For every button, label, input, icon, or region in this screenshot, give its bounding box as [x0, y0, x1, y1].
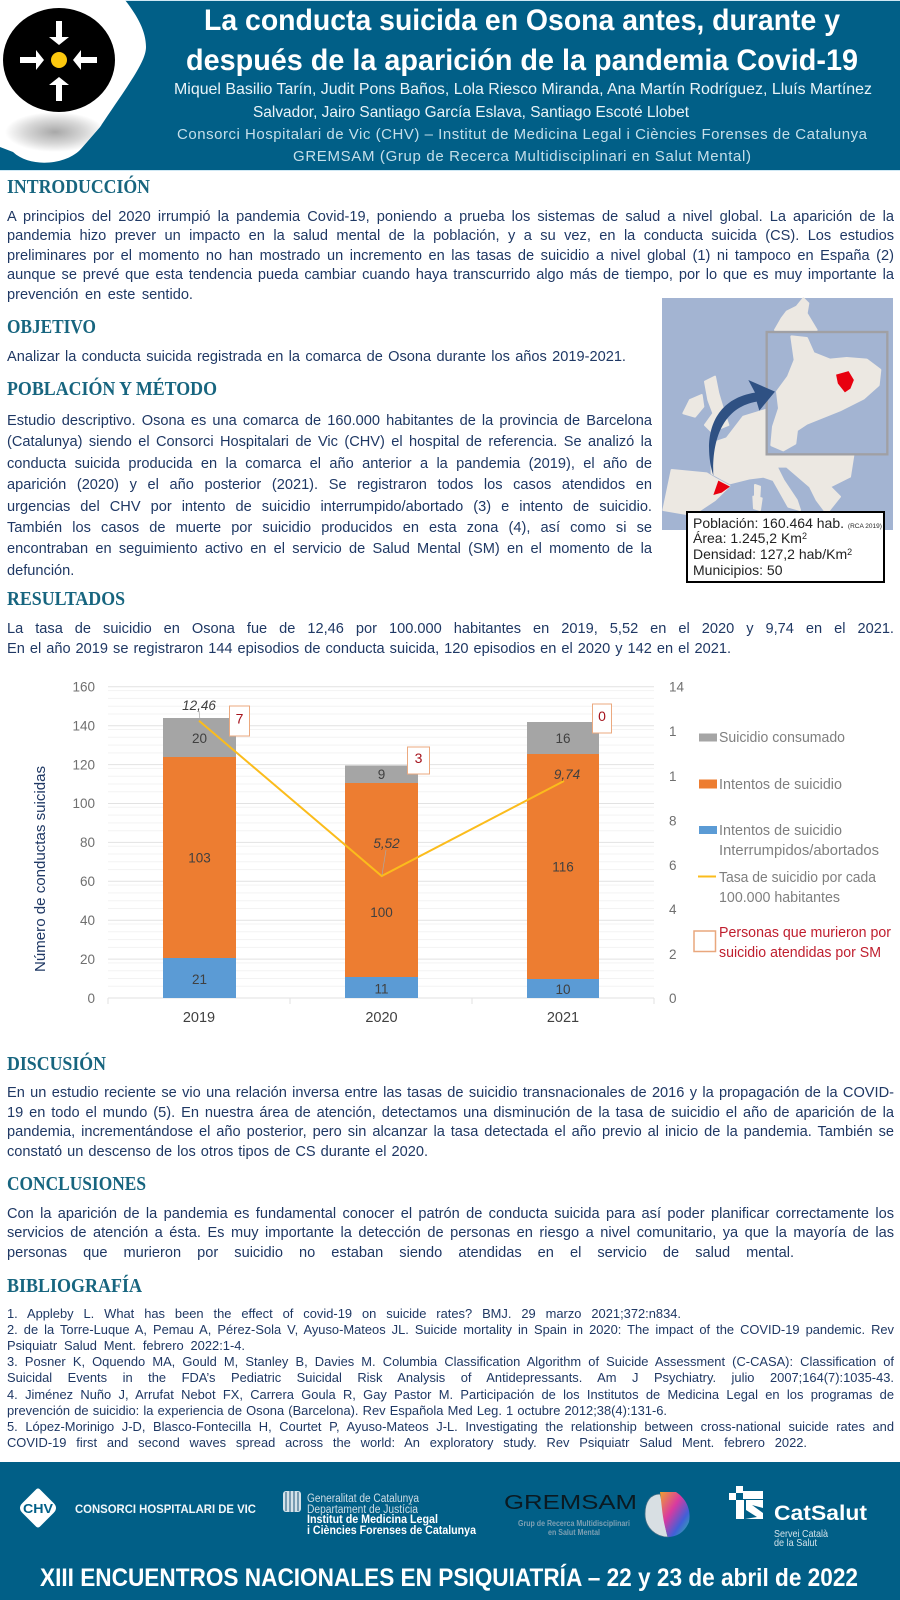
header banner: [0, 0, 900, 171]
logo: CHV: [22, 1491, 256, 1525]
left axis labels: [72, 680, 95, 1006]
title: después de la aparición de la pandemia Covid-19: [186, 44, 858, 77]
chart legend: [677, 720, 900, 965]
affiliations: [177, 126, 868, 165]
left axis labels: 140: [72, 718, 95, 734]
right axis labels: 0: [669, 991, 677, 1006]
right axis labels: 4: [669, 902, 677, 917]
logo: GREMSAM: GREMSAM: [504, 1492, 637, 1514]
logo: Generalitat de Catalunya: Departament de Justícia: [307, 1504, 419, 1516]
text block: población y método: Estudio descriptivo. Osona es una comarca de 160.000 habitantes de la provincia de Barcelona: [7, 413, 652, 429]
references list: Suicidal Events in the FDA’s Pediatric Suicidal Risk Analysis of Antidepressants. Am J Psychiatry. julio 2007;164(7):1035-43.: [7, 1370, 894, 1385]
text block: población y método: urgencias del CHV por intento de suicidio interrumpido/abortado (3) e intento de suicidio.: [7, 499, 652, 515]
bars 2020: 11: [374, 982, 389, 996]
right axis labels: 12: [669, 724, 684, 739]
chart legend: Intentos de suicidio: [719, 777, 842, 793]
references list: COVID-19 first and second waves spread across the world: An exploratory study. Rev Psiquiatr Salud Ment. febrero 2022.: [7, 1435, 807, 1450]
text block: población y método: [7, 413, 652, 579]
title: [186, 4, 858, 77]
text block: introducción: aunque se prevé que esta tendencia pueda cambiar cuando haya transcurrido algo más de tiempo, por lo que es muy importante la: [7, 267, 894, 283]
map: location of Osona: [662, 298, 893, 530]
bars 2021: [527, 722, 599, 998]
title: La conducta suicida en Osona antes, durante y: [204, 4, 840, 37]
logo: Generalitat de Catalunya: Institut de Medicina Legal: [307, 1514, 438, 1526]
heading: objetivo: OBJETIVO: [7, 316, 96, 338]
text block: población y método: (Catalunya) siendo el Consorci Hospitalari de Vic (CHV) el hospital de referencia. Se analizó la: [7, 434, 652, 450]
right axis labels: [669, 680, 685, 1006]
chart legend: 100.000 habitantes: [719, 890, 840, 906]
x axis labels: 2021: [547, 1010, 579, 1026]
references list: [7, 1306, 894, 1450]
references list: 4. Jiménez Nuño J, Arrufat Nebot FX, Carrera Goula R, Gay Pastor M. Participación de los Institutos de Medicina Legal en los programas de: [7, 1387, 894, 1402]
x axis labels: 2020: [365, 1010, 398, 1026]
text block: población y método: encontraban en seguimiento activo en el servicio de Salud Mental (SM) en el momento de la: [7, 541, 652, 557]
rate labels: 12,46: [182, 698, 216, 713]
map info box: 2: [802, 531, 807, 541]
text block: población y método: aparición (2020) y el año posterior (2021). Se registraron todos los casos atendidos en: [7, 477, 652, 493]
left axis labels: 20: [80, 952, 95, 967]
authors: Miquel Basilio Tarín, Judit Pons Baños, Lola Riesco Miranda, Ana Martín Rodríguez, Lluís Martínez: [174, 81, 872, 98]
text block: conclusiones: [7, 1206, 894, 1261]
text block: discusión: En un estudio reciente se vio una relación inversa entre las tasas de suicidio transnacionales de 2016 y la propagación de la COVID-: [7, 1085, 894, 1101]
logo: CHV: CONSORCI HOSPITALARI DE VIC: [75, 1504, 256, 1516]
map info box: Municipios: 50: [693, 562, 783, 578]
icon: brain: [645, 1492, 690, 1537]
text block: discusión: pandemia, incrementándose el año posterior, pero sin alcanzar la tasa detectada el año previo al inicio de la pandemia. También se: [7, 1124, 894, 1140]
text block: discusión: 19 en todo el mundo (5). En nuestra área de atención, detectamos una disminución de la tasa de suicidio el año de aparición de la: [7, 1105, 894, 1121]
chart gridlines: [108, 691, 654, 986]
footer band: [0, 1462, 900, 1600]
logo: GREMSAM: [504, 1492, 690, 1537]
map info box: Población: 160.464 hab. (RCA 2019): [693, 515, 882, 531]
left axis labels: 160: [72, 680, 95, 694]
chart legend: suicidio atendidas por SM: [719, 945, 881, 961]
text block: discusión: constató un descenso de los otros tipos de CS durante el 2020.: [7, 1144, 428, 1160]
text block: resultados: [7, 621, 894, 657]
references list: prevención de suicidio: la experiencia de Osona (Barcelona). Rev Española Med Leg. 1 octubre 2012;38(4):131-6.: [7, 1403, 667, 1418]
right axis labels: 14: [669, 680, 685, 694]
box: SM deaths 2019: 7: [236, 710, 244, 726]
box: SM deaths 2020: 3: [415, 750, 423, 766]
right axis labels: 2: [669, 947, 677, 962]
y axis title: Número de conductas suicidas: [32, 766, 49, 972]
text block: introducción: [7, 209, 894, 303]
logo: Generalitat de Catalunya: [283, 1491, 477, 1537]
chart legend: Tasa de suicidio por cada: [719, 870, 877, 886]
affiliations: Consorci Hospitalari de Vic (CHV) – Institut de Medicina Legal i Ciències Forenses de Catalunya: [177, 126, 868, 143]
logo: Generalitat de Catalunya: Generalitat de Catalunya: [307, 1493, 420, 1505]
rate labels: 9,74: [554, 767, 580, 782]
text block: introducción: A principios del 2020 irrumpió la pandemia Covid-19, poniendo a prueba los sistemas de salud a nivel global. La aparición de la: [7, 209, 894, 225]
map info box: [687, 512, 884, 582]
bars 2021: 10: [555, 982, 571, 997]
logo: GREMSAM: en Salut Mental: [548, 1528, 600, 1537]
logo: CHV: CHV: [23, 1502, 54, 1516]
icon: converging arrows logo: [0, 0, 146, 163]
text block: resultados: En el año 2019 se registraron 144 episodios de conducta suicida, 120 episodios en el 2020 y 142 en el 2021.: [7, 641, 731, 657]
heading: resultados: RESULTADOS: [7, 588, 125, 610]
box: SM deaths 2021: 0: [598, 708, 606, 724]
bars 2019: 103: [188, 850, 211, 866]
chart legend: Interrumpidos/abortados: [719, 843, 879, 859]
right axis labels: 6: [669, 858, 677, 873]
authors: Salvador, Jairo Santiago García Eslava, Santiago Escoté Llobet: [253, 104, 690, 121]
chart legend: Intentos de suicidio: [719, 823, 842, 839]
box: SM deaths 2021: [592, 704, 612, 733]
references list: 3. Posner K, Oquendo MA, Gould M, Stanley B, Davies M. Columbia Classification Algorithm of Suicide Assessment (C-CASA): Classification of: [7, 1354, 894, 1369]
x axis labels: 2019: [183, 1010, 215, 1026]
references list: 1. Appleby L. What has been the effect of covid-19 on suicide rates? BMJ. 29 marzo 2021;372:n834.: [7, 1306, 681, 1321]
rate line: [199, 721, 564, 876]
bars 2020: [345, 766, 418, 998]
text block: población y método: También los casos de muerte por suicidio producidos en esta zona (4), así como si se: [7, 520, 652, 536]
x axis labels: [183, 1010, 579, 1026]
text block: discusión: [7, 1085, 894, 1160]
chart legend: Suicidio consumado: [719, 730, 845, 746]
references list: 2. de la Torre-Luque A, Pemau A, Pérez-Sola V, Ayuso-Mateos JL. Suicide mortality in Spain in 2020: The impact of the COVID-19 pandemic. Rev: [7, 1322, 894, 1337]
logo: CatSalut: [729, 1486, 867, 1549]
heading: introducción: INTRODUCCIÓN: [7, 174, 150, 198]
map info box: 2: [847, 547, 852, 557]
bars 2019: [163, 718, 236, 998]
heading: conclusiones: CONCLUSIONES: [7, 1173, 146, 1195]
logo: CatSalut: de la Salut: [774, 1537, 817, 1549]
left axis labels: 0: [87, 991, 95, 1006]
text block: introducción: preliminares por el momento no han mostrado un incremento en las tasas de suicidio a nivel global (1) ni tampoco en España (2): [7, 248, 894, 264]
logo: Generalitat de Catalunya: i Ciències Forenses de Catalunya: [307, 1525, 477, 1537]
left axis labels: 120: [72, 758, 95, 772]
logo: GREMSAM: Grup de Recerca Multidisciplinari: [518, 1519, 630, 1528]
text block: objetivo: Analizar la conducta suicida registrada en la comarca de Osona durante los años 2019-2021.: [7, 349, 626, 365]
heading: discusión: DISCUSIÓN: [7, 1051, 106, 1075]
references list: Psiquiatr Salud Ment. febrero 2022:1-4.: [7, 1338, 245, 1353]
rate labels: [182, 698, 580, 875]
bars 2020: 100: [370, 905, 393, 920]
heading: bibliografía: BIBLIOGRAFÍA: [7, 1274, 142, 1297]
logo: CatSalut: Servei Català: [774, 1528, 828, 1540]
rate labels: 5,52: [373, 836, 400, 851]
left axis labels: 100: [72, 796, 95, 811]
left axis labels: 40: [80, 913, 95, 928]
map info box: Densidad: 127,2 hab/Km: [693, 546, 847, 562]
right axis labels: 10: [669, 769, 684, 784]
combo chart: suicidal behaviour by year: [32, 680, 900, 1026]
text block: resultados: La tasa de suicidio en Osona fue de 12,46 por 100.000 habitantes en 2019, 5,52 en el 2020 y 9,74 en el 2021.: [7, 621, 894, 637]
bars 2021: 116: [552, 860, 574, 874]
logo: CatSalut: CatSalut: [774, 1502, 867, 1525]
text block: introducción: prevención en este sentido.: [7, 287, 193, 303]
text block: conclusiones: Con la aparición de la pandemia es fundamental conocer el patrón de conducta suicida para así poder planificar correctamente los: [7, 1206, 894, 1222]
text block: conclusiones: personas que murieron por suicidio no estaban siendo atendidas en el servicio de salud mental.: [7, 1245, 794, 1261]
chart legend: Personas que murieron por: [719, 925, 891, 941]
left axis labels: 60: [80, 874, 95, 889]
bars 2019: 21: [192, 972, 207, 987]
affiliations: GREMSAM (Grup de Recerca Multidisciplinari en Salut Mental): [293, 148, 751, 165]
text block: conclusiones: servicios de atención a ésta. Es muy importante la detección de personas en riesgo a nivel comunitario, ya que la mayoría de las: [7, 1225, 894, 1241]
map info box: Área: 1.245,2 Km: [693, 530, 802, 546]
text block: población y método: conducta suicida producida en la comarca el año anterior a la pandemia (2019), el año de: [7, 456, 652, 472]
references list: 5. López-Morinigo J-D, Blasco-Fontecilla H, Courtet P, Ayuso-Mateos J-L. Investigating the relationship between cross-national suicide rates and: [7, 1419, 894, 1434]
bars 2019: 20: [192, 731, 207, 746]
text block: introducción: pandemia hizo prever un impacto en la salud mental de la población, y a su vez, en la conducta suicida (CS). Los estudios: [7, 228, 894, 244]
authors: [174, 81, 872, 121]
box: SM deaths 2019: [230, 706, 250, 736]
bars 2021: 16: [555, 731, 571, 746]
bars 2020: 9: [378, 767, 385, 782]
right axis labels: 8: [669, 814, 677, 828]
text block: población y método: defunción.: [7, 563, 74, 579]
left axis labels: 80: [80, 835, 95, 850]
heading: población y método: POBLACIÓN Y MÉTODO: [7, 376, 217, 400]
box: SM deaths 2020: [408, 747, 430, 774]
